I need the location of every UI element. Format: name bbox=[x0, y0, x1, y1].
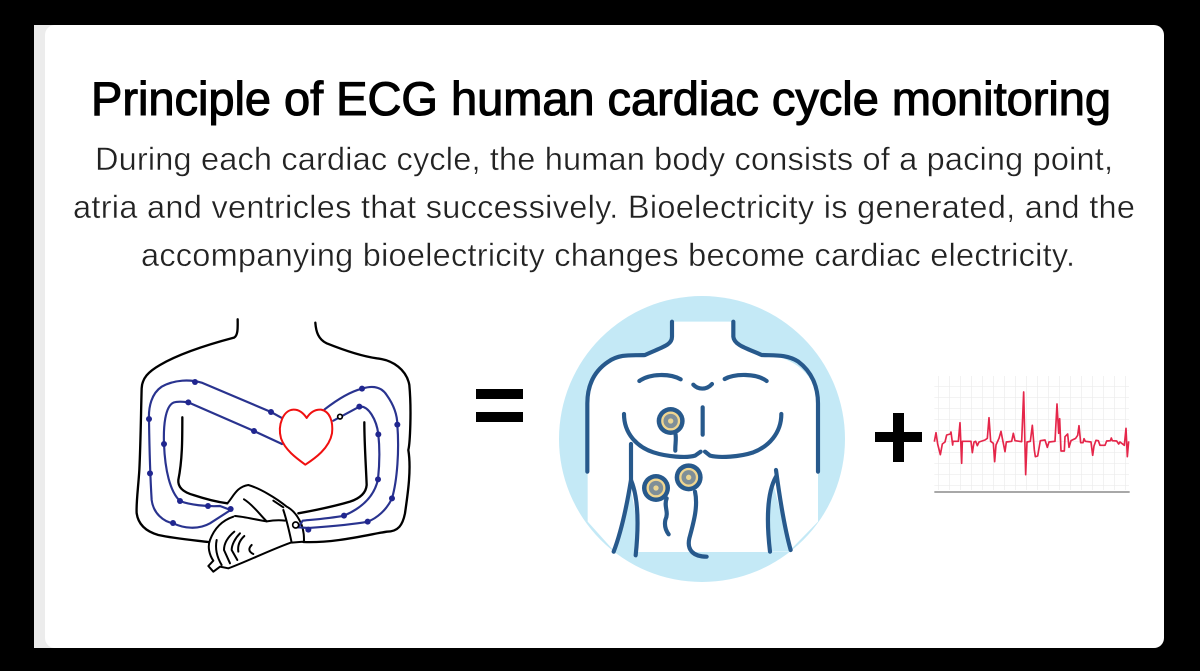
light blue circle with white torso bbox=[559, 296, 845, 582]
open electrodes bbox=[338, 414, 342, 419]
blue nodes bbox=[146, 379, 400, 533]
text block: description: During each cardiac cycle, the human body consists of a pacing point, bbox=[95, 141, 1113, 177]
red heart bbox=[280, 410, 332, 465]
equals sign bbox=[476, 389, 523, 422]
text block: description: atria and ventricles that successively. Bioelectricity is generated, and the bbox=[73, 189, 1135, 225]
baseline bbox=[934, 489, 1130, 495]
blue conduction lines bbox=[149, 381, 398, 528]
illustration: body with wrist device and conduction loop bbox=[137, 319, 410, 572]
chart: ECG trace bbox=[934, 376, 1130, 492]
plus sign bbox=[875, 413, 922, 462]
body outline bbox=[137, 319, 410, 542]
torso outline bbox=[587, 322, 818, 557]
text block: description bbox=[73, 141, 1135, 273]
illustration: torso with ECG electrodes bbox=[559, 296, 845, 582]
title: Principle of ECG human cardiac cycle monitoring bbox=[91, 72, 1111, 125]
electrode patches bbox=[642, 407, 703, 502]
hand and watch bbox=[208, 485, 304, 572]
text block: description: accompanying bioelectricity changes become cardiac electricity. bbox=[141, 237, 1075, 273]
watch sensor bbox=[293, 522, 299, 528]
trace bbox=[934, 392, 1129, 475]
grid bbox=[934, 376, 1129, 490]
